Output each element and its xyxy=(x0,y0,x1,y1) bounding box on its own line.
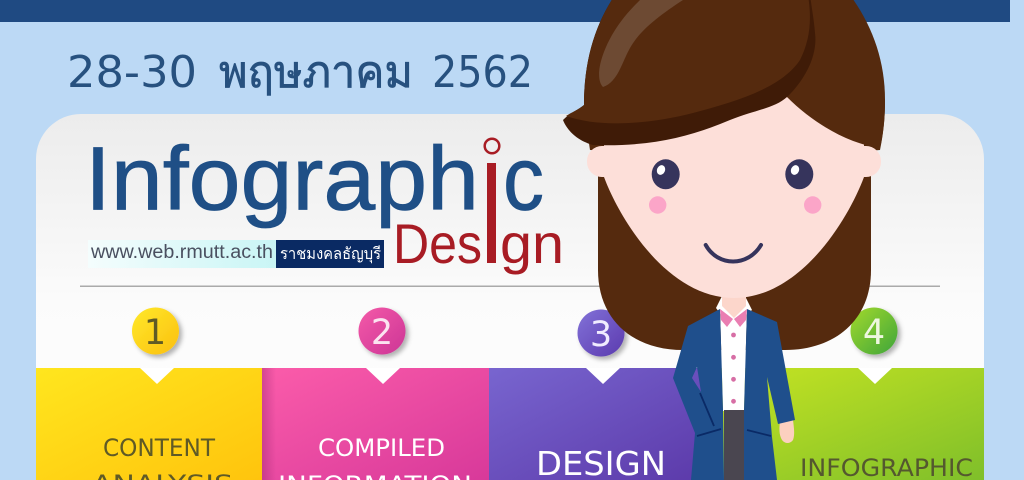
face xyxy=(604,90,864,298)
date heading xyxy=(67,47,533,98)
panel: main card xyxy=(36,114,984,480)
hair highlight xyxy=(599,0,683,87)
badge 4 xyxy=(850,308,898,354)
column 2: compiled information: COMPILED xyxy=(318,434,445,462)
word: Design: Des xyxy=(393,212,482,275)
word: Infographic: Infograph xyxy=(85,130,479,230)
fringe xyxy=(563,0,815,145)
right eye xyxy=(785,159,813,189)
column 3: design xyxy=(489,368,704,480)
date heading: 28-30 xyxy=(67,47,197,98)
shirt xyxy=(720,309,747,411)
trousers xyxy=(724,410,745,480)
website badge xyxy=(88,240,384,268)
shirt buttons xyxy=(731,333,736,404)
badge 3: 3 xyxy=(590,315,612,355)
hand xyxy=(779,420,794,443)
date heading: พฤษภาคม xyxy=(219,48,413,97)
jacket pocket lines xyxy=(697,393,771,436)
badge 1: 1 xyxy=(144,313,166,353)
pink collar xyxy=(720,309,747,327)
ears xyxy=(587,146,881,177)
website badge: www.web.rmutt.ac.th xyxy=(90,242,273,263)
date heading: 2562 xyxy=(432,47,533,98)
white collar tips xyxy=(716,296,752,316)
badge 1 xyxy=(132,308,179,354)
word: Infographic: c xyxy=(503,130,544,230)
left cheek xyxy=(649,196,666,214)
smile xyxy=(706,245,761,262)
left eye xyxy=(652,159,680,189)
column 1: content analysis: CONTENT xyxy=(103,434,215,462)
back hair xyxy=(598,120,871,350)
jacket left xyxy=(673,309,724,480)
badge 4: 4 xyxy=(863,313,885,353)
shared red letter i xyxy=(485,139,499,263)
badge 2 xyxy=(358,308,406,354)
jacket right xyxy=(744,309,795,480)
neck xyxy=(722,285,746,318)
column 1: content analysis xyxy=(36,368,262,480)
column 2: compiled information xyxy=(262,368,489,480)
website badge: ราชมงคลธัญบุรี xyxy=(280,245,381,264)
character: cartoon woman xyxy=(563,0,885,480)
top banner bar xyxy=(0,0,1010,22)
word: Design: gn xyxy=(500,212,564,275)
right side hair xyxy=(770,60,885,148)
word: Design xyxy=(393,212,564,275)
right cheek xyxy=(804,196,821,214)
badge 3 xyxy=(578,310,624,356)
column 4: infographic xyxy=(704,368,984,480)
badge 2: 2 xyxy=(371,313,393,353)
title: Infographic Design xyxy=(85,130,564,275)
